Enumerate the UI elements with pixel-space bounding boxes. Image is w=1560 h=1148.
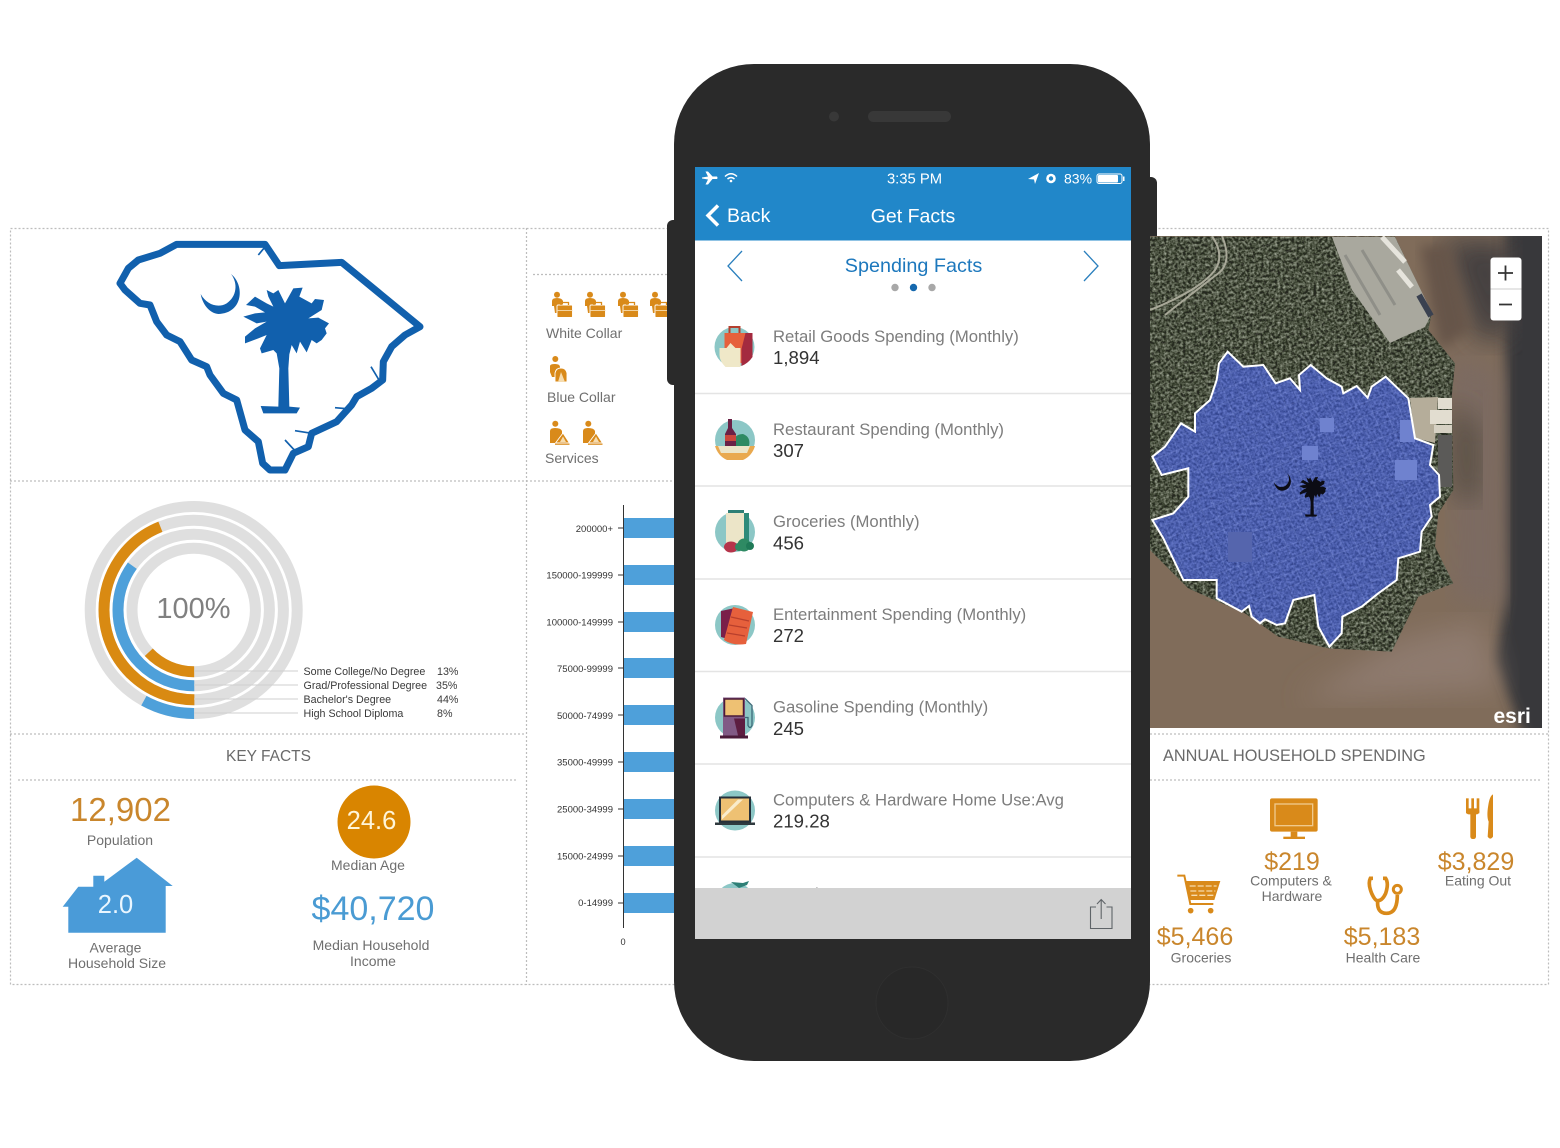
axis and ticks (618, 505, 624, 928)
stat: median income: Median Household (313, 937, 429, 953)
spend: computers: Hardware (1262, 888, 1323, 904)
text: travel: Travel A (773, 884, 834, 904)
legend: 35% (436, 680, 458, 692)
text: restaurant (773, 420, 1004, 461)
stat: population: 12,902 (70, 791, 171, 828)
row: gasoline (715, 698, 988, 739)
icon: share (1090, 900, 1112, 928)
label: blue collar: Blue Collar (547, 389, 616, 405)
stat: population (70, 791, 171, 848)
east buildings (1430, 398, 1452, 487)
icon: stethoscope (1369, 878, 1401, 913)
status clock: 3:35 PM (887, 172, 942, 188)
text: entertainment (773, 605, 1026, 646)
icon: fork and knife (1466, 794, 1493, 839)
legend: Grad/Professional Degree (304, 680, 427, 692)
water background (1150, 236, 1542, 728)
icon: tickets (715, 605, 755, 645)
icon: monitor (1270, 798, 1318, 839)
legend: 8% (437, 708, 453, 720)
phone side buttons (667, 177, 1157, 385)
panel: education donut chart (90, 506, 459, 720)
text: restaurant: Restaurant Spending (Monthly) (773, 420, 1004, 439)
stat: population: Population (87, 832, 153, 848)
spend: eating out: Eating Out (1445, 872, 1511, 888)
icon: wine and salad (715, 419, 755, 460)
text: groceries (773, 512, 920, 554)
row separators (695, 394, 1131, 857)
panel: satellite map (1150, 225, 1560, 740)
port terminal (1332, 237, 1432, 343)
label: services: Services (545, 450, 599, 466)
axis labels: 200000+ (576, 524, 613, 535)
spend: computers: Computers & (1250, 872, 1333, 888)
text: groceries: 456 (773, 532, 804, 554)
legend: Some College/No Degree (304, 666, 425, 678)
axis labels: 25000-34999 (557, 804, 613, 816)
stat: household size house: Average (90, 940, 142, 956)
stat: median age (331, 786, 410, 873)
land (1150, 236, 1455, 652)
stat: median income: $40,720 (312, 890, 434, 928)
esri logo: esri (1494, 705, 1531, 728)
water shading (1300, 225, 1560, 740)
icon: gas pump (715, 698, 755, 738)
stat: household size house: 2.0 (98, 891, 133, 919)
heading: key facts: KEY FACTS (226, 748, 311, 765)
spend: health care (1344, 923, 1421, 966)
row: groceries (715, 510, 920, 554)
legend: 44% (437, 694, 459, 706)
legend: Bachelor's Degree (304, 694, 391, 706)
port terminal buildings (1345, 237, 1431, 316)
phone body (674, 64, 1150, 1061)
icon: blue collar (550, 356, 567, 382)
stat: household size house (63, 858, 173, 971)
icon: travel plane (715, 881, 755, 923)
row: entertainment (715, 605, 1026, 646)
bars (623, 518, 678, 913)
donut center value: 100% (156, 593, 231, 625)
panel: annual household spending (1157, 794, 1514, 966)
icon: shopping bags (714, 327, 754, 367)
text: restaurant: 307 (773, 440, 804, 461)
stat: median age: Median Age (331, 857, 405, 873)
donut value arcs (90, 506, 297, 714)
status icons right: 83% (1064, 170, 1092, 186)
phone camera (829, 112, 839, 122)
text: gasoline (773, 698, 988, 739)
icon: map marker palm (1299, 477, 1326, 517)
panel: South Carolina state outline (120, 244, 420, 470)
row: restaurant (715, 419, 1004, 461)
text: computers (773, 790, 1064, 832)
back chevron (708, 206, 718, 226)
icon: palmetto tree (243, 288, 329, 413)
legend: High School Diploma (304, 708, 403, 720)
spend: groceries: $5,466 (1157, 923, 1233, 951)
status icons right (1028, 170, 1124, 186)
dashboard frame grid (10, 228, 1549, 985)
heading: annual household spending: ANNUAL HOUSEHOLD SPENDING (1163, 747, 1426, 765)
text: entertainment: Entertainment Spending (Monthly) (773, 605, 1026, 624)
text: groceries: Groceries (Monthly) (773, 512, 920, 531)
state outline (120, 244, 420, 470)
zoom control (1490, 258, 1522, 320)
title: Get Facts (871, 206, 956, 228)
concrete yard (1410, 397, 1438, 443)
panel: occupation icons (545, 292, 670, 466)
axis labels: 100000-149999 (546, 618, 613, 628)
icon: shopping cart (1177, 876, 1220, 913)
icon row: services (550, 421, 602, 445)
status icons left (702, 172, 737, 184)
text: retail goods (773, 327, 1019, 368)
spend: computers: $219 (1264, 848, 1320, 876)
axis labels (546, 524, 626, 947)
spend: health care: Health Care (1346, 950, 1421, 966)
stat: median income: Income (350, 953, 396, 969)
icon: milk and vegetables (715, 510, 755, 552)
icon: laptop (715, 790, 755, 830)
row: retail goods (714, 327, 1019, 368)
axis labels: 50000-74999 (557, 711, 613, 722)
text: retail goods: 1,894 (773, 347, 820, 368)
neighborhood polygon (1150, 340, 1450, 660)
donut grey rings (90, 506, 297, 714)
text: computers: 219.28 (773, 810, 830, 832)
icon row: white collar (552, 292, 670, 318)
panel: phone screen (695, 167, 1131, 939)
text: retail goods: Retail Goods Spending (Monthly) (773, 327, 1019, 346)
panel: key facts (63, 786, 434, 971)
stat: household size house: Household Size (68, 955, 166, 971)
phone speaker (868, 111, 951, 122)
carousel header: Spending Facts (845, 255, 982, 277)
spend: health care: $5,183 (1344, 923, 1420, 951)
text: gasoline: 245 (773, 718, 804, 739)
axis labels: 75000-99999 (557, 664, 613, 675)
text: computers: Computers & Hardware Home Use:Avg (773, 790, 1064, 810)
axis labels: 0-14999 (578, 898, 613, 909)
row: computers (715, 790, 1064, 832)
stat: median age: 24.6 (347, 807, 396, 835)
spend: groceries (1157, 923, 1233, 966)
back label: Back (727, 205, 771, 227)
label: white collar: White Collar (546, 325, 623, 341)
stat: median income (312, 890, 434, 969)
row: travel (clipped) (715, 881, 834, 923)
coastal inlets (258, 246, 380, 452)
panel: income bar chart (546, 505, 678, 947)
legend leader lines (194, 671, 298, 713)
axis labels: 150000-199999 (546, 570, 613, 582)
legend: 13% (437, 666, 459, 678)
axis labels: 15000-24999 (557, 852, 613, 862)
icon: map marker moon (1274, 473, 1291, 491)
axis labels: 35000-49999 (557, 758, 613, 768)
spend: eating out (1438, 848, 1514, 888)
phone home button (876, 967, 948, 1039)
spend: groceries: Groceries (1171, 950, 1231, 966)
spend: eating out: $3,829 (1438, 848, 1514, 876)
axis labels: 0 (620, 937, 626, 947)
carousel header (728, 251, 1098, 291)
spend: computers (1250, 848, 1333, 904)
curved roads (1150, 236, 1227, 315)
legend (304, 666, 459, 720)
bottom toolbar (695, 888, 1131, 939)
app header bar (695, 167, 1131, 240)
text: entertainment: 272 (773, 625, 804, 646)
icon: crescent moon (201, 274, 240, 314)
text: gasoline: Gasoline Spending (Monthly) (773, 698, 988, 716)
